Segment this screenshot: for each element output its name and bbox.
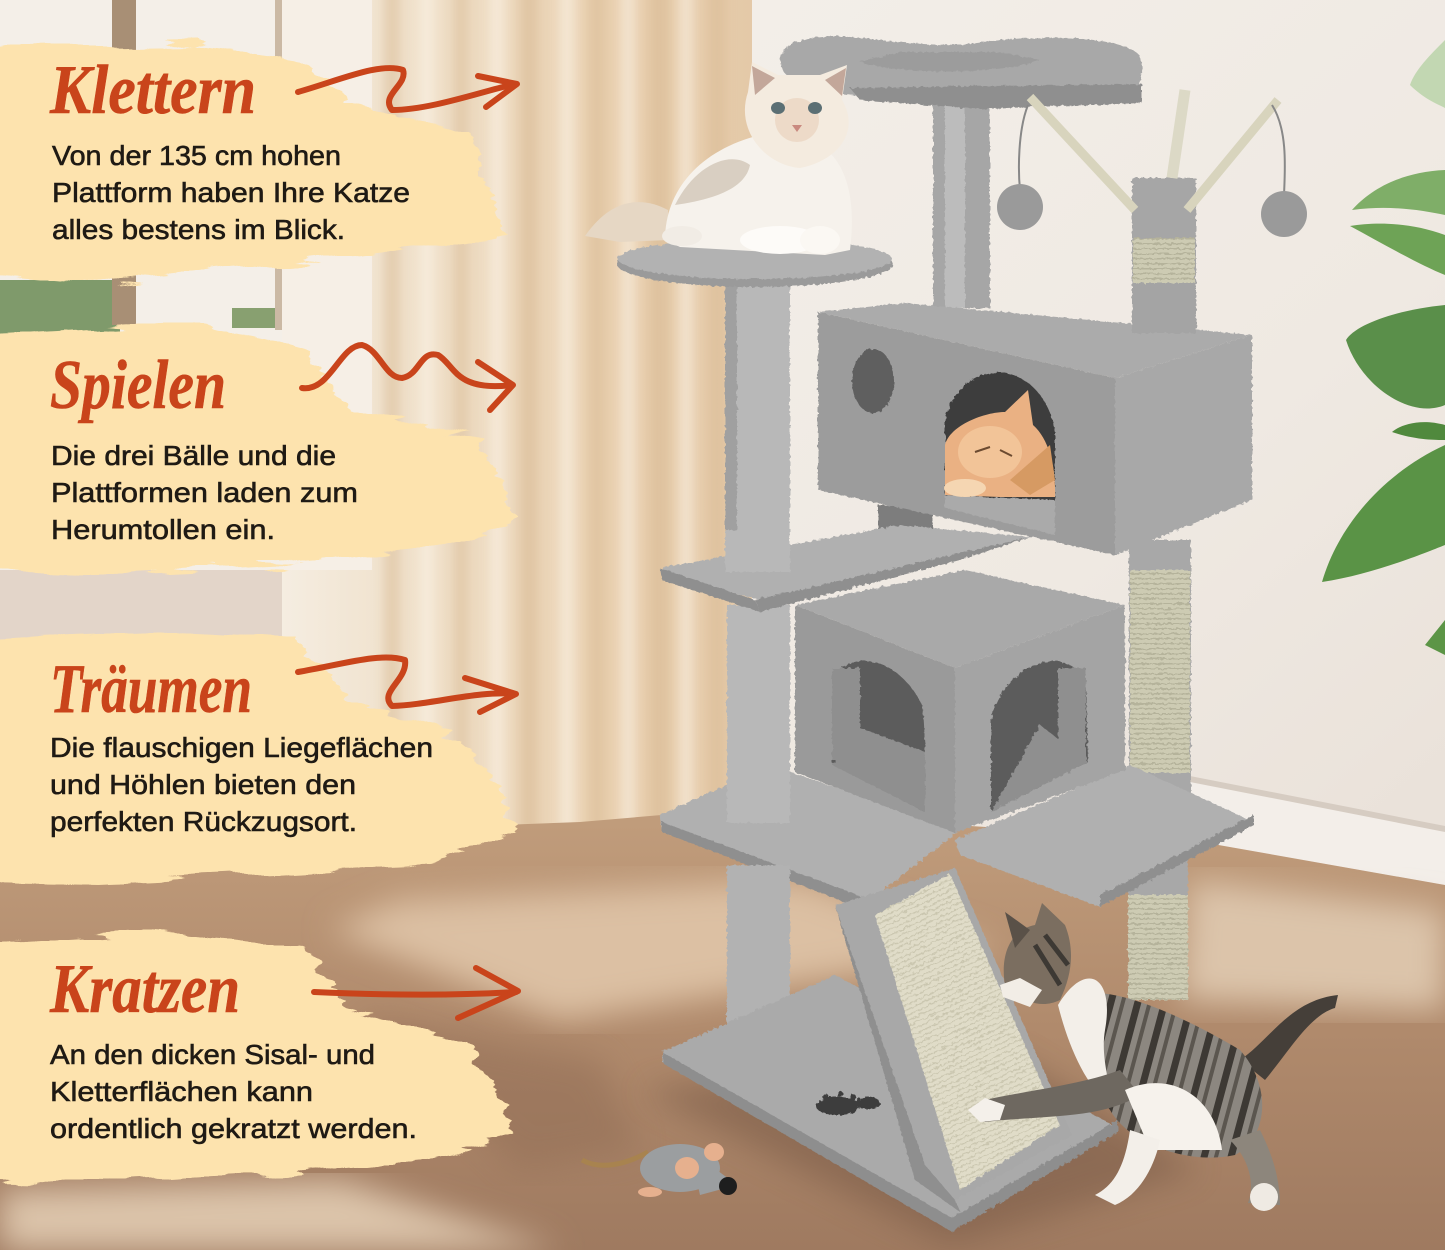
text Träumen [50, 732, 433, 837]
lower house left arch [832, 661, 925, 812]
left round platform [617, 239, 893, 575]
arrow Träumen [298, 657, 516, 712]
panel: Träumen [0, 632, 516, 882]
lower platforms [660, 765, 1254, 908]
heading Spielen: Spielen [50, 347, 226, 424]
orange cat [944, 390, 1055, 497]
text Träumen: Die flauschigen Liegeflächen [50, 732, 433, 763]
panel: Spielen [0, 325, 515, 575]
lower house right arch [991, 661, 1088, 810]
text Spielen: Plattformen laden zum [51, 477, 358, 508]
arrow Kratzen [314, 968, 518, 1018]
curtains [282, 0, 752, 825]
text Spielen: Die drei Bälle und die [51, 440, 336, 471]
text Spielen [51, 440, 358, 545]
upper house [818, 178, 1252, 555]
arrow Klettern [298, 68, 517, 110]
panel: Kratzen [0, 930, 518, 1183]
heading Kratzen: Kratzen [49, 951, 240, 1028]
text Klettern [52, 140, 410, 245]
text Träumen: und Höhlen bieten den [50, 769, 356, 800]
text Kratzen: ordentlich gekratzt werden. [50, 1113, 417, 1144]
mid platform [660, 505, 1030, 612]
bottom post [727, 865, 790, 1063]
toy sticks and balls [997, 90, 1307, 237]
top platform with post [780, 36, 1142, 308]
base [662, 975, 1118, 1232]
plants right [1322, 40, 1445, 655]
toy mouse [582, 1143, 737, 1197]
text Klettern: Von der 135 cm hohen [52, 140, 341, 171]
banner 4 [0, 930, 515, 1183]
arch door [945, 372, 1055, 522]
heading Träumen: Träumen [50, 651, 252, 728]
text Träumen: perfekten Rückzugsort. [50, 806, 357, 837]
text Kratzen: An den dicken Sisal- und [50, 1039, 375, 1070]
panel: Klettern [0, 45, 517, 282]
text Spielen: Herumtollen ein. [51, 514, 275, 545]
baseboard right [1190, 780, 1445, 885]
heading Klettern: Klettern [49, 52, 256, 129]
round hole [852, 349, 894, 413]
cat tree [617, 36, 1307, 1245]
left post middle [727, 605, 790, 823]
right post with sisal [1128, 540, 1191, 1000]
window left [0, 0, 375, 870]
text Klettern: alles bestens im Blick. [52, 214, 345, 245]
text Klettern: Plattform haben Ihre Katze [52, 177, 410, 208]
floor [0, 810, 1445, 1250]
shadow under tree [640, 1050, 1200, 1245]
banner 1 [0, 45, 505, 282]
text Kratzen [50, 1039, 417, 1144]
ramp [835, 868, 1072, 1212]
banner 3 [0, 632, 515, 882]
white cat [585, 62, 852, 255]
banner 2 [0, 325, 515, 575]
lower house [795, 570, 1125, 833]
tabby cat [968, 903, 1338, 1211]
paw print [816, 1091, 880, 1115]
text Kratzen: Kletterflächen kann [50, 1076, 313, 1107]
arrow Spielen [302, 345, 513, 410]
